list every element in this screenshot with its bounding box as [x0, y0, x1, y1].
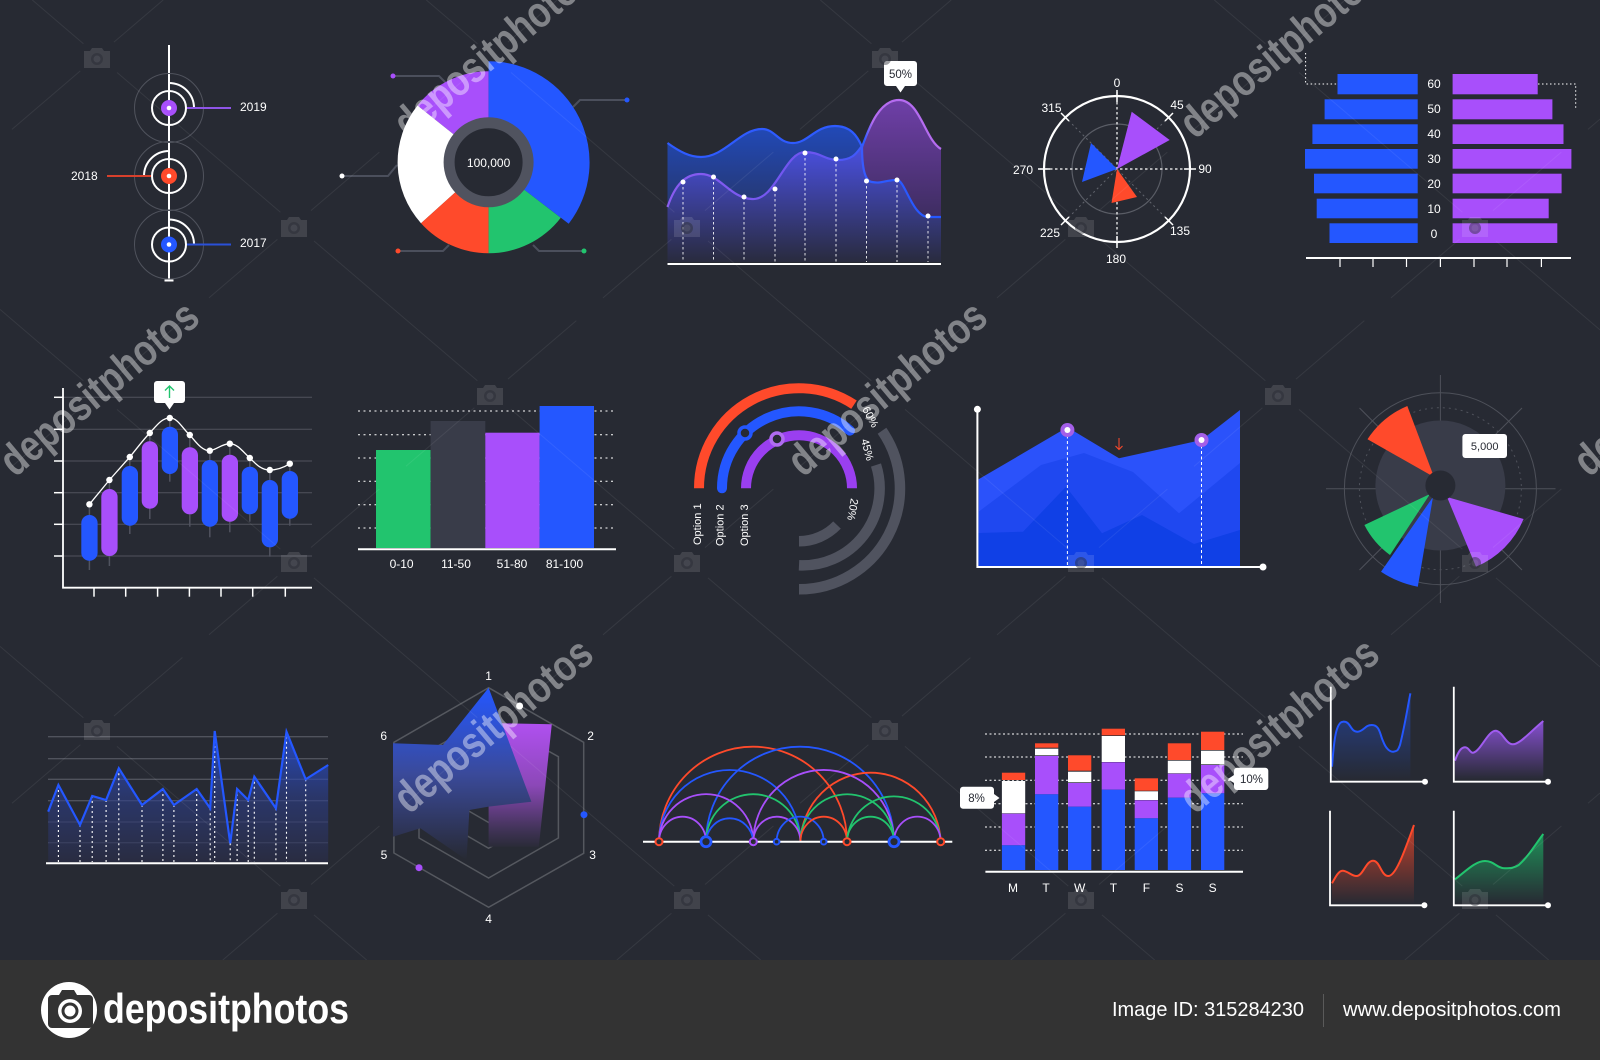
- arc diagram: [643, 747, 952, 847]
- logo icon: camera: [41, 982, 97, 1038]
- polar labels: 180: [1106, 252, 1126, 266]
- watermark overlay: depositphotos: [384, 628, 602, 823]
- option labels: Option 1: [692, 503, 704, 545]
- bar labels: [390, 557, 584, 571]
- radar labels: 3: [589, 848, 596, 862]
- option labels: [692, 503, 751, 546]
- small chart: purple: [1454, 687, 1551, 785]
- radar labels: [380, 669, 596, 926]
- polar labels: [1013, 76, 1212, 266]
- tooltip: 50%: [884, 61, 917, 92]
- label: 2019: 2019: [240, 100, 267, 114]
- day labels: T: [1110, 881, 1118, 895]
- day labels: W: [1074, 881, 1086, 895]
- day labels: [1008, 881, 1217, 895]
- small chart: green: [1454, 811, 1551, 908]
- red down arrow: [1116, 438, 1122, 450]
- watermark overlay: depositphotos: [1170, 628, 1388, 823]
- small chart: blue: [1331, 687, 1428, 785]
- day labels: F: [1143, 881, 1150, 895]
- footer bar: [0, 960, 1600, 1060]
- radar chart: [380, 669, 596, 926]
- tooltip: 8%: [960, 787, 1000, 809]
- radar labels: 4: [485, 912, 492, 926]
- website url: www.depositphotos.com: [1342, 999, 1561, 1021]
- radar labels: 2: [587, 729, 594, 743]
- row labels: 50: [1427, 102, 1441, 116]
- row labels: 20: [1427, 177, 1441, 191]
- day labels: M: [1008, 881, 1018, 895]
- polar labels: 0: [1114, 76, 1121, 90]
- row labels: 60: [1427, 77, 1441, 91]
- bar labels: 11-50: [441, 557, 471, 571]
- radar labels: 5: [381, 848, 388, 862]
- tooltip: up arrow: [154, 381, 185, 410]
- day labels: S: [1209, 881, 1217, 895]
- tooltip: 8%: 8%: [968, 793, 985, 805]
- polar labels: 45: [1170, 98, 1184, 112]
- timeline chart: [71, 45, 267, 280]
- logo wordmark: depositphotos: [103, 985, 349, 1032]
- bar labels: 51-80: [497, 557, 528, 571]
- radar labels: 1: [485, 669, 492, 683]
- polar labels: 270: [1013, 163, 1033, 177]
- row labels: 0: [1431, 227, 1438, 241]
- tooltip: 10%: 10%: [1240, 774, 1263, 786]
- percent labels: 20%: [844, 497, 860, 521]
- option labels: Option 2: [714, 504, 726, 546]
- bar labels: 81-100: [546, 557, 584, 571]
- row labels: 30: [1427, 152, 1441, 166]
- layered area chart: [668, 61, 941, 264]
- tooltip: 10%: [1228, 768, 1268, 790]
- population pyramid bars: [1305, 53, 1576, 267]
- radial wedge chart: [1326, 375, 1556, 603]
- radar labels: 6: [380, 729, 387, 743]
- percent labels: 60%: [859, 405, 880, 430]
- polar labels: 90: [1198, 162, 1212, 176]
- watermark overlay: depositphotos: [778, 291, 996, 486]
- donut chart: [340, 61, 630, 253]
- blue mountain area chart: [974, 406, 1266, 570]
- option labels: Option 3: [739, 504, 751, 546]
- image id: Image ID: 315284230: [1112, 999, 1304, 1021]
- row labels: [1427, 77, 1441, 241]
- row labels: 10: [1427, 202, 1441, 216]
- label: 2018: 2018: [71, 169, 98, 183]
- tooltip: 5,000: 5,000: [1471, 441, 1498, 453]
- row labels: 40: [1427, 127, 1441, 141]
- polar labels: 225: [1040, 226, 1060, 240]
- radial progress chart: [692, 388, 900, 589]
- percent labels: 45%: [858, 438, 875, 462]
- candlestick chart: [54, 381, 312, 597]
- polar labels: 315: [1041, 101, 1062, 115]
- small chart: red: [1330, 811, 1427, 908]
- bar chart: [358, 406, 616, 571]
- spiky line chart: [46, 731, 328, 863]
- day labels: T: [1042, 881, 1050, 895]
- percent labels: [844, 405, 880, 521]
- label: 2017: 2017: [240, 236, 267, 250]
- tooltip: 5,000: [1462, 434, 1507, 458]
- polar chart: [1013, 76, 1212, 266]
- day labels: S: [1175, 881, 1184, 895]
- polar labels: 135: [1170, 224, 1190, 238]
- bar labels: 0-10: [390, 557, 414, 571]
- center value: 100,000: [467, 156, 511, 170]
- tooltip: 50%: 50%: [889, 69, 912, 81]
- stacked bar chart: [960, 729, 1268, 895]
